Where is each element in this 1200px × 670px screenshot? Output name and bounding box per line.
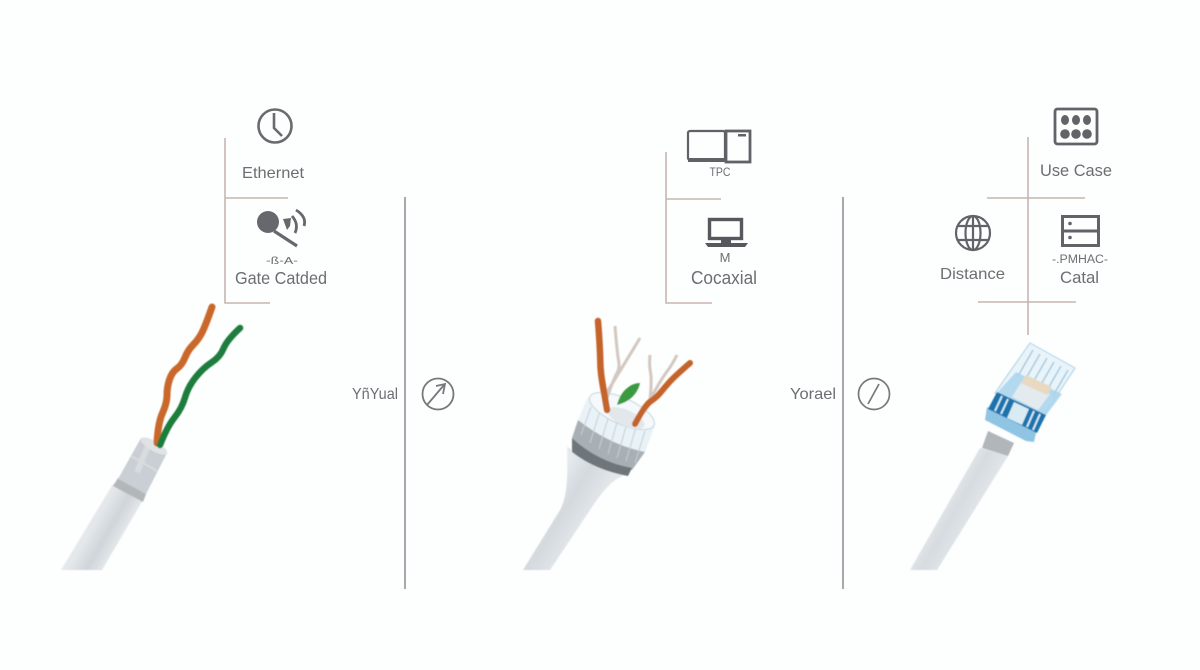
sheath and flare [523, 447, 630, 570]
small label: TPC: TPC [710, 165, 731, 179]
panel: use case column [940, 109, 1112, 335]
label: Cocaxial: Cocaxial [691, 268, 757, 288]
cable: coaxial [523, 321, 690, 570]
blue stripes [988, 392, 1046, 433]
icon: laptop [705, 220, 748, 247]
icon: grid panel [1055, 109, 1097, 144]
contact pins [1018, 350, 1068, 396]
separator lines [405, 197, 843, 589]
label: Distance: Distance [940, 266, 1005, 283]
label: Use Case: Use Case [1040, 161, 1112, 180]
connector clear head [995, 343, 1075, 417]
label: Yñual: YñYual [352, 386, 398, 403]
grey ring [982, 431, 1014, 456]
light blue band [995, 372, 1062, 418]
small label: PMHAC: -.PMHAC- [1052, 254, 1108, 266]
metal shield [118, 438, 167, 494]
icon: monitors [688, 131, 750, 162]
white ribbed ring [578, 397, 655, 452]
sheath [910, 448, 1008, 570]
dark band [572, 438, 632, 476]
dotted insulation [604, 403, 648, 433]
sheath band [113, 478, 146, 502]
icon: server [1062, 216, 1099, 246]
label: Ethernet: Ethernet [242, 165, 305, 182]
small label: M: M [720, 250, 730, 265]
label: Catal: Catal [1060, 268, 1099, 287]
green leaf [617, 383, 640, 405]
icon: circled arrow [422, 378, 454, 410]
outer sheath [61, 484, 143, 570]
label: Yorael: Yorael [790, 386, 836, 403]
icon: circled slash [858, 378, 890, 410]
cable: RJ45 connector [910, 343, 1075, 570]
panel: coaxial column [666, 131, 757, 303]
green wire [160, 328, 240, 445]
icon: clock [258, 110, 292, 142]
panel: ethernet column [225, 110, 327, 303]
icon: magnifier with signal [257, 210, 305, 246]
label: Gate Catded: Gate Catded [235, 268, 327, 288]
icon: globe [956, 216, 990, 250]
pale wires [607, 326, 677, 400]
grey ribbed section [572, 420, 645, 470]
inner white wires [1012, 381, 1050, 410]
cable: twisted pair [61, 307, 240, 570]
collar [985, 407, 1040, 442]
ribs [581, 407, 645, 463]
ring opening [585, 385, 659, 437]
small label: -ß-A- [266, 255, 299, 267]
orange wires [598, 321, 607, 410]
orange wire [157, 307, 212, 443]
